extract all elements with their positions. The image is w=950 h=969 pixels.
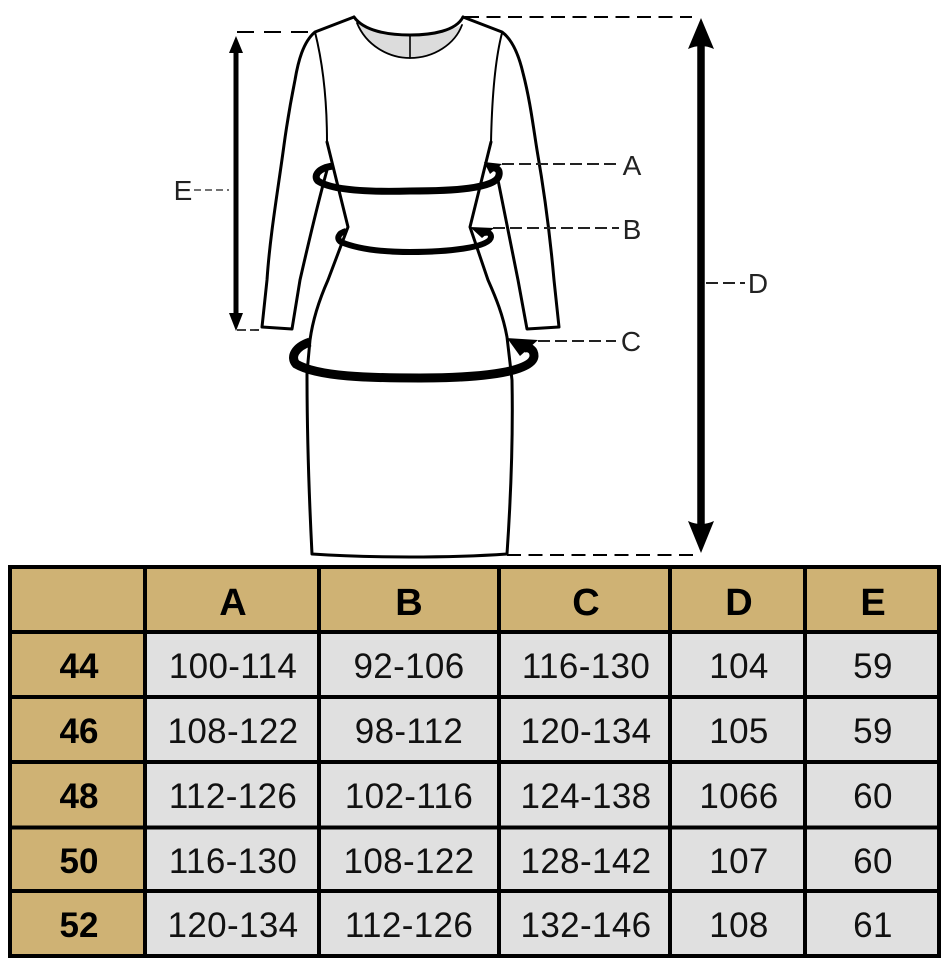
row size 44: 100-114 <box>169 647 297 686</box>
header row: A <box>219 582 247 624</box>
row size 44: 44 <box>60 647 99 686</box>
row size 48 <box>60 777 893 816</box>
row size 48: 124-138 <box>521 777 651 816</box>
row size 46: 105 <box>709 712 769 751</box>
row size 46 <box>60 712 893 751</box>
row size 50: 107 <box>709 842 769 881</box>
row size 48: 102-116 <box>345 777 473 816</box>
row size 52: 61 <box>853 906 893 945</box>
row size 50: 116-130 <box>169 842 297 881</box>
callout D <box>706 268 768 299</box>
table backgrounds <box>8 565 941 958</box>
header row: C <box>572 582 600 624</box>
neckline with inner back <box>354 17 463 58</box>
row size 50: 108-122 <box>344 842 474 881</box>
row size 52: 112-126 <box>345 906 473 945</box>
left sleeve <box>262 17 354 329</box>
header row: D <box>725 582 753 624</box>
row size 52: 132-146 <box>521 906 651 945</box>
table grid lines <box>10 567 939 956</box>
measurement B: waist loop <box>338 227 494 252</box>
measurement A: bust loop <box>316 162 502 191</box>
row size 50 <box>60 842 893 881</box>
row size 48: 48 <box>60 777 98 816</box>
right sleeve <box>463 17 559 329</box>
callout D: D <box>748 268 768 299</box>
callout B: B <box>623 214 641 245</box>
row size 46: 120-134 <box>521 712 651 751</box>
row size 44: 92-106 <box>353 647 465 686</box>
row size 50: 128-142 <box>521 842 651 881</box>
dress diagram <box>262 17 559 557</box>
measurement C: hip loop <box>294 338 538 378</box>
row size 44 <box>60 647 893 686</box>
row size 44: 59 <box>853 647 893 686</box>
row size 52: 120-134 <box>168 906 298 945</box>
arrow D: total length <box>465 17 714 555</box>
row size 52 <box>60 906 893 945</box>
row size 46: 59 <box>853 712 893 751</box>
row size 44: 116-130 <box>522 647 650 686</box>
armhole seams <box>315 32 502 142</box>
row size 46: 98-112 <box>355 712 463 751</box>
header row: B <box>395 582 423 624</box>
row size 50: 50 <box>60 842 98 881</box>
row size 48: 1066 <box>699 777 779 816</box>
arrow E: sleeve length <box>229 32 312 331</box>
row size 48: 60 <box>853 777 893 816</box>
callout C <box>538 326 641 357</box>
row size 46: 46 <box>60 712 98 751</box>
callout C: C <box>621 326 641 357</box>
row size 52: 52 <box>60 906 98 945</box>
row size 46: 108-122 <box>168 712 298 751</box>
header row: E <box>860 582 886 624</box>
header row <box>219 582 886 624</box>
callout E: E <box>174 175 192 206</box>
row size 52: 108 <box>709 906 769 945</box>
dress body outline <box>307 142 512 557</box>
row size 50: 60 <box>853 842 893 881</box>
callout E <box>174 175 229 206</box>
row size 44: 104 <box>709 647 769 686</box>
callout A: A <box>623 150 642 181</box>
callout A <box>502 150 642 181</box>
size table <box>8 565 941 958</box>
row size 48: 112-126 <box>169 777 297 816</box>
